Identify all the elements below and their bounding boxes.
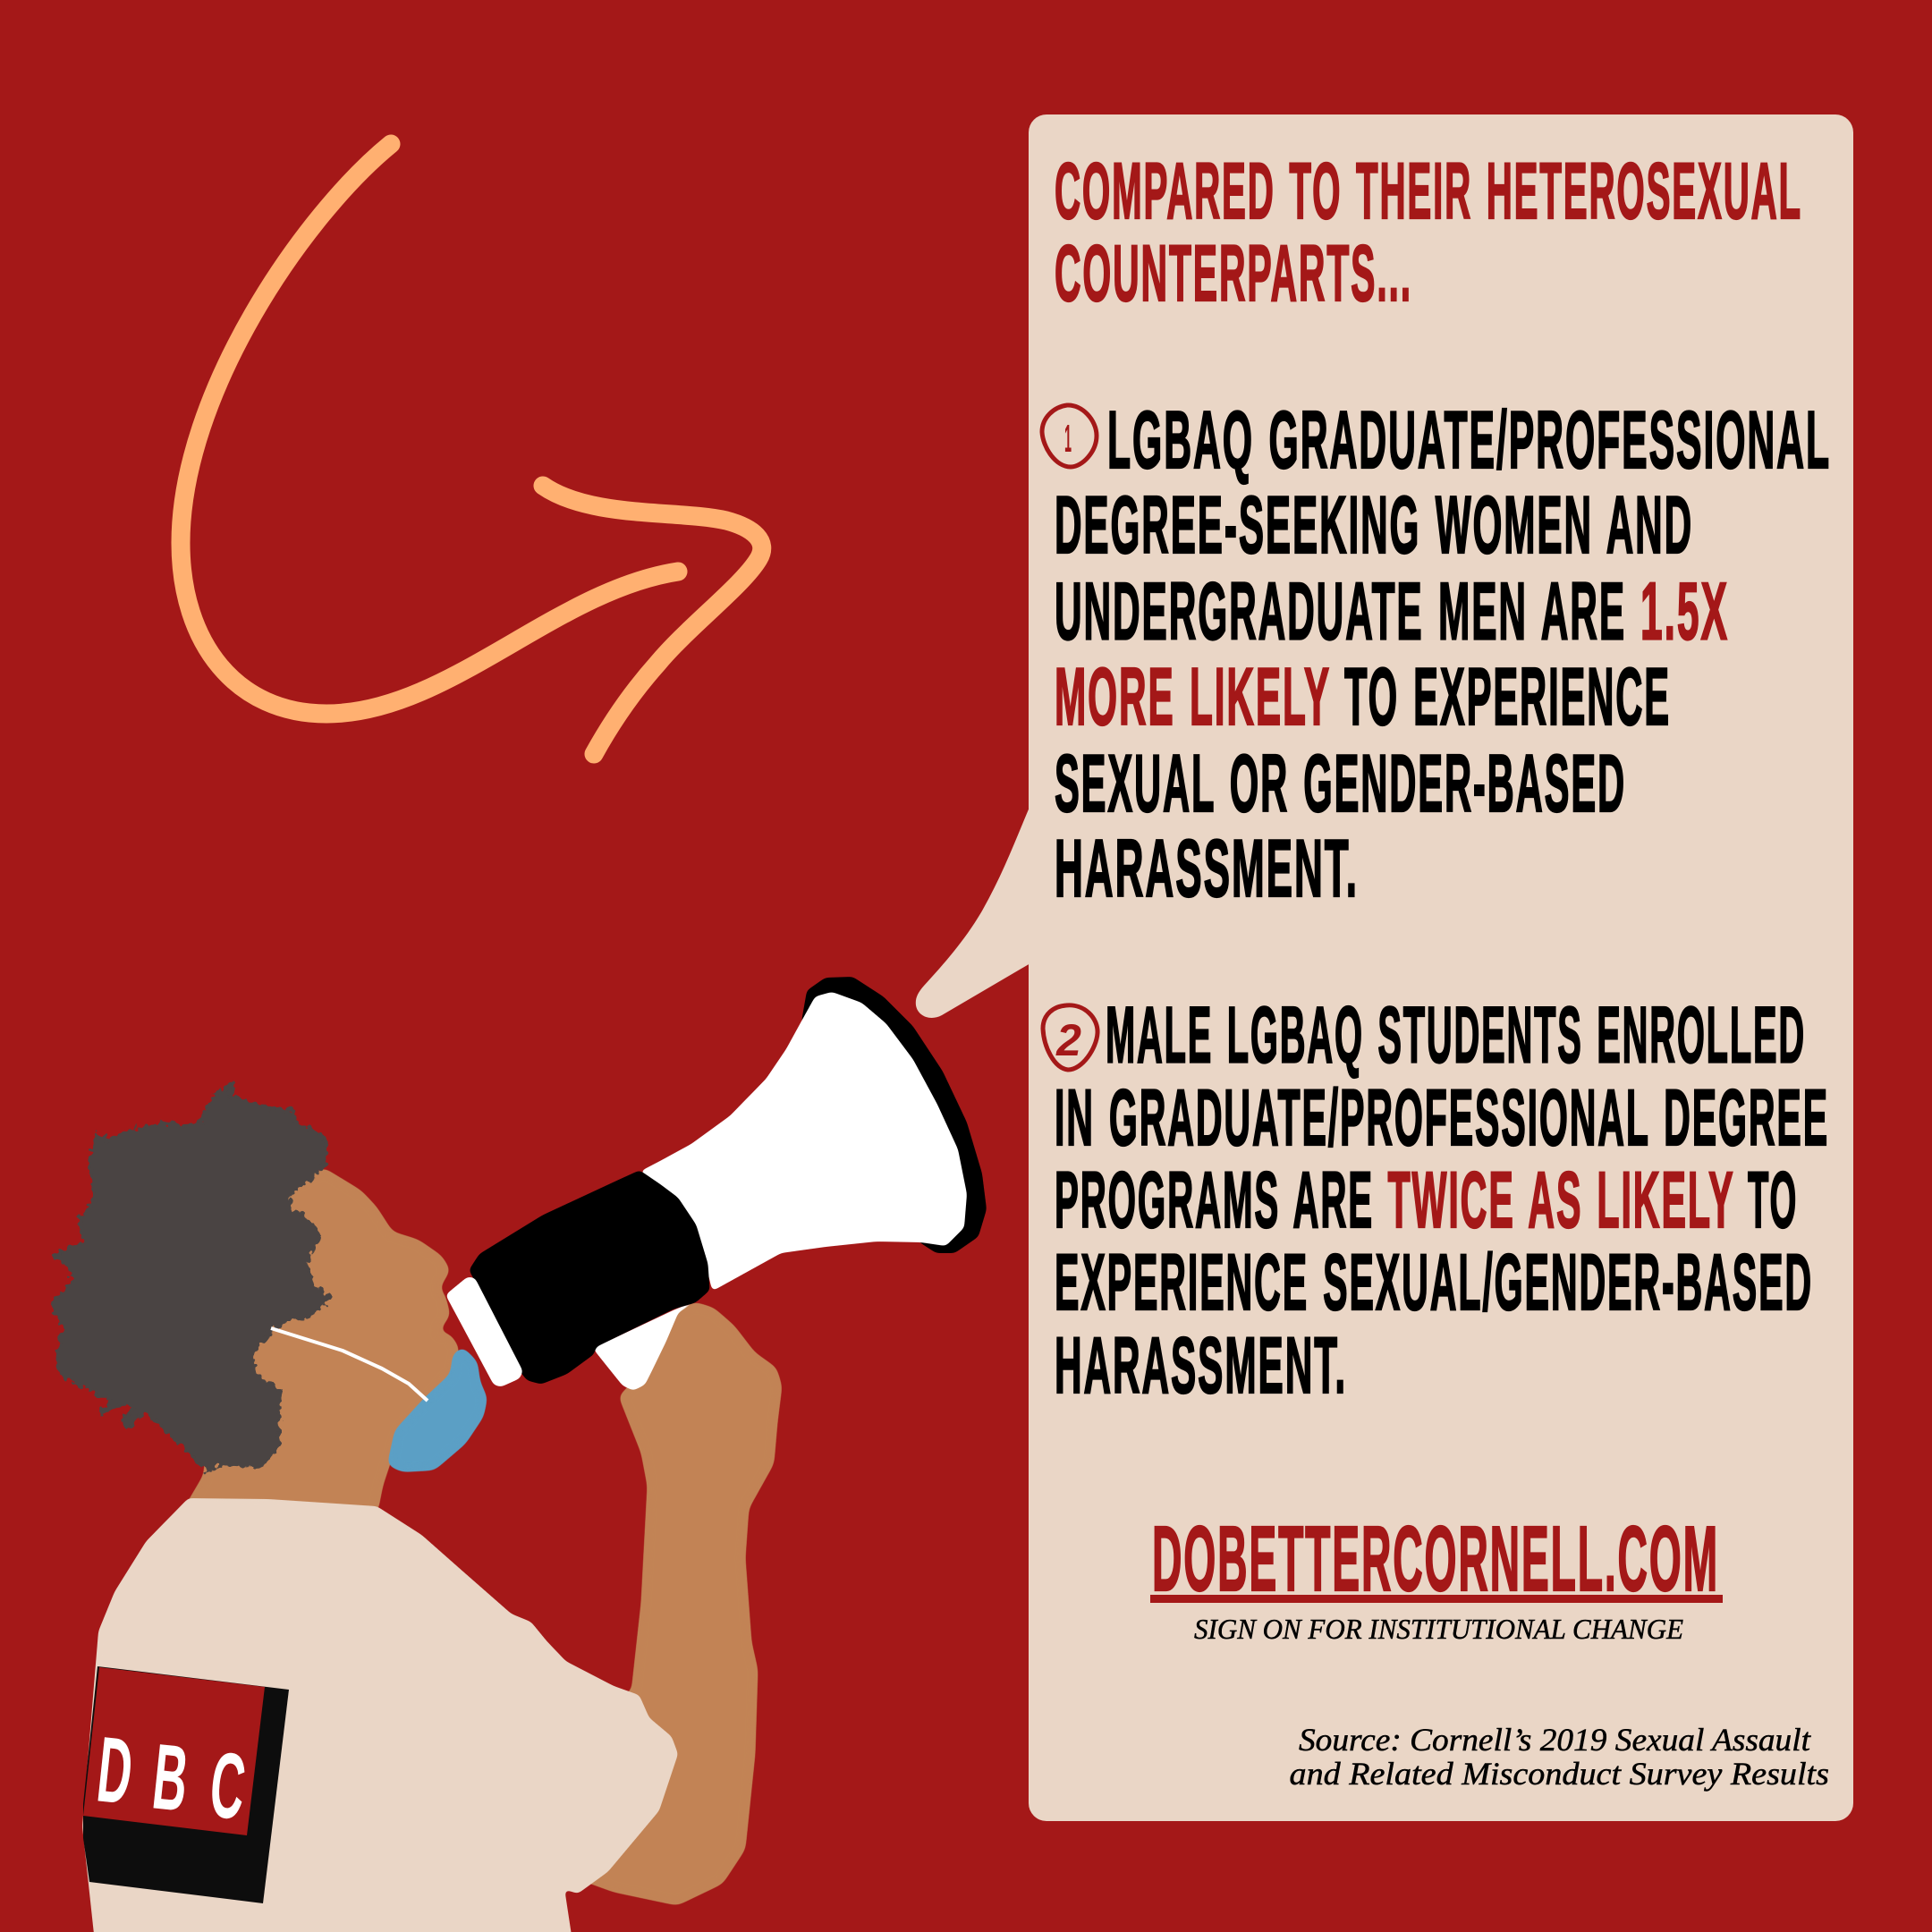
text block: finding 2: HARASSMENT. (1055, 1320, 1347, 1410)
armband logo text: D (93, 1718, 138, 1825)
icon: number 1 badge (1042, 405, 1097, 467)
megaphone grip (470, 1172, 708, 1383)
hair (52, 1082, 329, 1470)
source note (1290, 1722, 1829, 1792)
text block: finding 2: PROGRAMS ARE (1055, 1155, 1374, 1244)
text block: finding 1 (1055, 395, 1831, 914)
text block: finding 1: MORE LIKELY (1055, 652, 1331, 742)
armband logo text (93, 1718, 250, 1840)
speech bubble body (1029, 114, 1853, 1821)
heading (1055, 146, 1802, 318)
heading: COUNTERPARTS... (1055, 228, 1412, 318)
face and neck (183, 1169, 458, 1512)
icon: hand-drawn arrow (181, 144, 762, 754)
megaphone (447, 978, 986, 1389)
armband (83, 1666, 289, 1903)
mask strap (271, 1328, 428, 1401)
source note: Source: Cornell’s 2019 Sexual Assault (1299, 1722, 1811, 1758)
text block: finding 1: HARASSMENT. (1055, 824, 1359, 914)
megaphone rim (802, 978, 986, 1252)
face mask (389, 1349, 486, 1470)
megaphone handle (595, 1301, 695, 1389)
text block: finding 2: TO (1748, 1155, 1798, 1244)
t-shirt (83, 1499, 677, 1932)
icon: number 2 badge: 2 (1055, 1015, 1081, 1065)
speech bubble tail (916, 805, 1030, 1018)
megaphone bell (641, 993, 966, 1290)
source note: and Related Misconduct Survey Results (1290, 1756, 1829, 1792)
text block: finding 1: 1.5X (1640, 567, 1729, 657)
illustration: protester with megaphone (52, 978, 986, 1932)
text block: finding 2 (1055, 989, 1829, 1410)
arm and hand (555, 1303, 781, 1904)
panel: speech bubble (916, 114, 1853, 1821)
icon: number 1 badge: 1 (1064, 417, 1072, 461)
megaphone mouthpiece (447, 1278, 521, 1385)
icon: number 2 badge (1043, 1005, 1097, 1070)
call to action: SIGN ON FOR INSTITUTIONAL CHANGE (1194, 1613, 1683, 1645)
armband logo text: C (206, 1733, 250, 1840)
armband logo text: B (148, 1725, 193, 1832)
